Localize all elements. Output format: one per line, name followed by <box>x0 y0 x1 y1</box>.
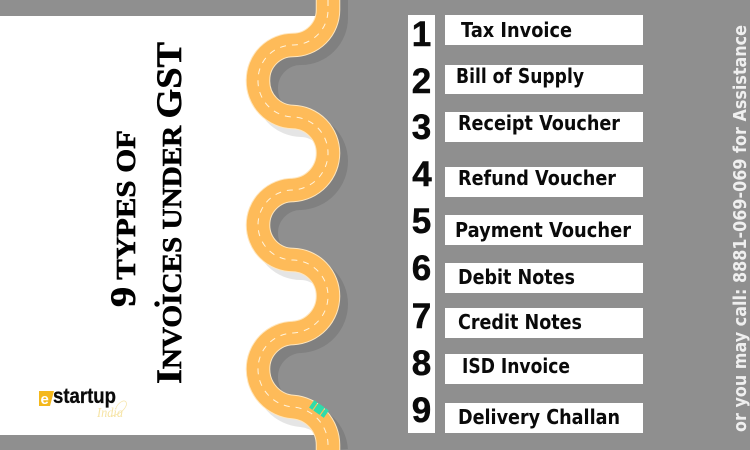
item 2: Bill of Supply: Bill of Supply <box>456 64 584 88</box>
number strip <box>408 15 435 433</box>
winding road <box>258 0 336 450</box>
number 2: 2 <box>412 62 431 101</box>
icon: green car <box>309 400 329 418</box>
strip background <box>408 15 435 433</box>
item 5: Payment Voucher: Payment Voucher <box>455 218 631 242</box>
item 1: Tax Invoice <box>445 15 643 45</box>
logo script swash <box>112 401 126 416</box>
number 3: 3 <box>412 108 431 147</box>
road shadow <box>266 0 336 450</box>
item 8: ISD Invoice <box>445 354 643 384</box>
title line 2: INVOICES UNDER GST <box>149 42 189 384</box>
item 4: Refund Voucher: Refund Voucher <box>458 166 616 190</box>
white left panel <box>0 10 328 435</box>
item 2: Bill of Supply <box>445 64 643 94</box>
logo wordmark: startup <box>53 385 116 408</box>
logo mark letter: e <box>40 391 49 408</box>
item 7: Credit Notes <box>445 308 643 338</box>
item 6: Debit Notes <box>445 263 643 293</box>
road centre dashes <box>258 0 328 450</box>
item 8: ISD Invoice: ISD Invoice <box>462 354 570 378</box>
number 9: 9 <box>412 391 431 430</box>
number 4: 4 <box>412 155 432 194</box>
number 1: 1 <box>412 15 431 54</box>
number 6: 6 <box>412 249 431 288</box>
logo mark <box>39 391 54 406</box>
item 9: Delivery Challan: Delivery Challan <box>458 405 620 429</box>
item 7: Credit Notes: Credit Notes <box>458 310 582 334</box>
title line 1: 9 TYPES OF <box>103 130 143 307</box>
logo: estartup India <box>39 385 126 421</box>
title <box>103 42 189 384</box>
item 1: Tax Invoice: Tax Invoice <box>461 18 572 42</box>
item 6: Debit Notes: Debit Notes <box>458 265 575 289</box>
title i dot <box>154 301 160 307</box>
logo script: India <box>96 406 123 421</box>
road surface <box>258 0 328 450</box>
item 3: Receipt Voucher: Receipt Voucher <box>458 111 620 135</box>
number 7: 7 <box>412 297 431 336</box>
road edge <box>258 0 328 450</box>
number 5: 5 <box>412 202 431 241</box>
number 8: 8 <box>412 344 431 383</box>
